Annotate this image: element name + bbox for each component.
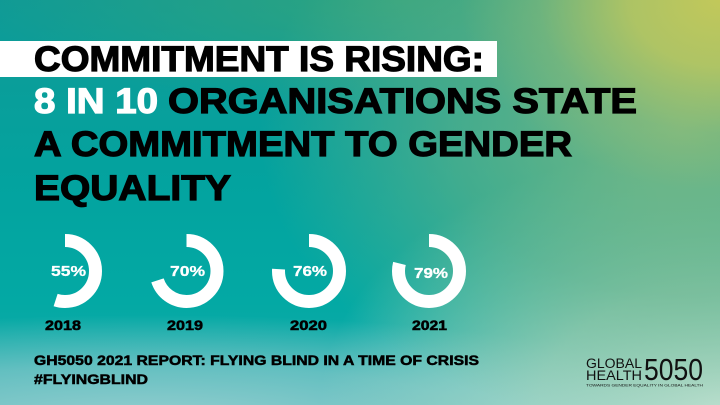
- report reference footer: GH5050 2021 REPORT: FLYING BLIND IN A TIME OF CRISIS: [34, 353, 479, 368]
- heading line 4: EQUALITY: [34, 169, 231, 208]
- Global Health 50/50 logo: 5050: [644, 352, 703, 387]
- donut 2020: 76%: 76%: [293, 263, 327, 280]
- donut 2018: 55%: [34, 240, 96, 333]
- Global Health 50/50 logo: HEALTH: [586, 368, 642, 383]
- Global Health 50/50 logo: [586, 352, 703, 388]
- Global Health 50/50 logo: GLOBAL: [586, 356, 643, 371]
- heading line 2: ORGANISATIONS STATE: [168, 82, 637, 121]
- donut 2021: 79%: 2021: [412, 318, 448, 333]
- donut 2021: 79%: 79%: [414, 265, 448, 282]
- heading highlight bar: [0, 41, 497, 77]
- donut 2020: 76%: [278, 240, 340, 333]
- donut charts row: [34, 240, 460, 333]
- donut 2018: 55%: 2018: [45, 318, 82, 333]
- heading highlight: 8 in 10: 8 IN 10: [34, 82, 158, 121]
- donut 2020: 76%: 2020: [290, 318, 327, 333]
- donut 2018: 55%: 55%: [51, 263, 86, 280]
- heading line 3: A COMMITMENT TO GENDER: [34, 125, 572, 164]
- donut 2019: 70%: [156, 240, 217, 333]
- report reference footer: [34, 353, 479, 387]
- title: [34, 40, 637, 208]
- donut 2019: 70%: 2019: [167, 318, 203, 333]
- Global Health 50/50 logo: TOWARDS GENDER EQUALITY IN GLOBAL HEALTH: [586, 382, 703, 388]
- report reference footer: #FLYINGBLIND: [34, 372, 148, 387]
- donut 2021: 79%: [398, 240, 460, 333]
- donut 2019: 70%: 70%: [170, 263, 205, 280]
- heading line 1: COMMITMENT IS RISING:: [34, 40, 484, 79]
